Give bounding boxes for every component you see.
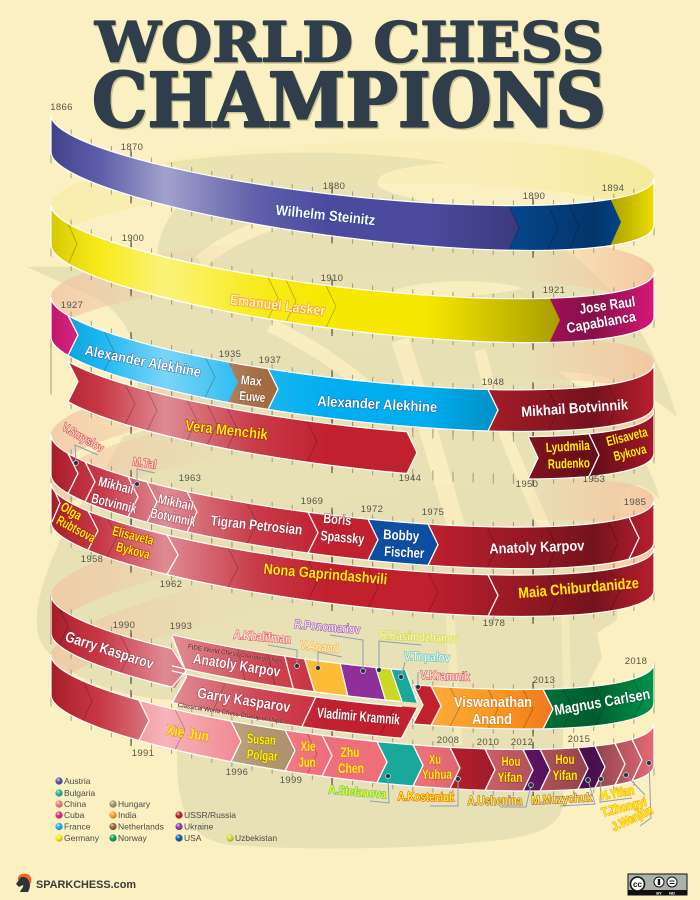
champion: Zhu Chen: Zhu xyxy=(340,744,360,760)
champion: Boris Spassky: Spassky xyxy=(320,527,365,547)
champion: Elisaveta Bykova: Bykova xyxy=(115,539,152,562)
callout: V.Smyslov: V.Smyslov xyxy=(60,420,107,455)
year labels: 1921 xyxy=(543,285,565,296)
legend item: Ukraine: Ukraine xyxy=(184,822,214,832)
champion: Mikhail Botvinnik xyxy=(90,473,139,517)
year labels: 1910 xyxy=(321,273,343,284)
legend item: USSR/Russia: USSR/Russia xyxy=(184,810,236,820)
ribbon women 1986-2018 xyxy=(50,655,655,832)
year labels: 1990 xyxy=(113,620,135,631)
callout: A.Stefanova xyxy=(328,774,390,803)
champion: Alexander Alekhine (2): Alexander Alekhine xyxy=(317,394,438,416)
title: CHAMPIONS xyxy=(94,58,608,146)
champion: Xie Jun (return) xyxy=(298,738,316,770)
champion: Bobby Fischer xyxy=(383,526,425,561)
champion: Mikhail Botvinnik (return): Mikhail xyxy=(157,491,195,514)
champion: Lyudmila Rudenko: Rudenko xyxy=(548,455,590,472)
callout: A.Khalifman xyxy=(233,628,299,668)
champion: Susan Polgar: Susan xyxy=(246,730,276,748)
year labels: 1972 xyxy=(361,504,383,515)
legend item: India xyxy=(109,810,137,820)
champion: Max Euwe: Euwe xyxy=(239,388,266,405)
year labels: 1969 xyxy=(301,496,323,507)
year labels: 1958 xyxy=(81,554,103,565)
year labels: 1978 xyxy=(483,618,505,629)
year labels: 1993 xyxy=(170,621,192,632)
callout: R.Ponomariov: R.Ponomariov xyxy=(294,617,361,637)
champion: Hou Yifan: Hou xyxy=(502,753,520,769)
champion: Anatoly Karpov (FIDE): Anatoly Karpov xyxy=(192,650,282,681)
champion: Susan Polgar xyxy=(246,730,279,764)
year labels: 1890 xyxy=(523,191,545,202)
callout: J.Wenjun xyxy=(609,761,655,834)
ribbon women 1956-1986 xyxy=(50,483,655,618)
champion: Viswanathan Anand xyxy=(454,694,532,728)
callout: V.Anand: V.Anand xyxy=(299,638,340,656)
champion: Elisaveta Bykova: Bykova xyxy=(612,441,648,464)
year labels: 1866 xyxy=(50,102,73,113)
callout: M.Tal: M.Tal xyxy=(132,454,157,472)
legend item: China: China xyxy=(64,799,86,809)
champion: Zhu Chen: Chen xyxy=(338,760,364,776)
callout: A.Stefanova: A.Stefanova xyxy=(328,783,388,802)
champion: Jose Raul Capablanca xyxy=(565,294,638,337)
champion: Boris Spassky: Boris xyxy=(323,510,352,528)
callout: V.Topalov xyxy=(399,649,450,679)
callout: J.Wenjun: J.Wenjun xyxy=(609,803,655,834)
callout: R.Kasimdzhanov: R.Kasimdzhanov xyxy=(379,628,459,646)
callout: A.Khalifman: A.Khalifman xyxy=(233,628,292,647)
year labels: 1894 xyxy=(602,183,624,194)
champion: Mikhail Botvinnik (return) xyxy=(149,491,197,530)
champion: Hou Yifan xyxy=(498,753,522,785)
callout: A.Kosteniuk xyxy=(397,777,460,806)
callout: T.Zhongyi xyxy=(600,773,648,819)
callout: V.Anand xyxy=(299,638,342,670)
callout: V.Topalov: V.Topalov xyxy=(404,649,450,665)
callout: H.Yifan: H.Yifan xyxy=(599,783,635,803)
champion: Vera Menchik: Vera Menchik xyxy=(184,417,269,444)
champion: Xie Jun (return): Xie xyxy=(300,738,316,754)
champion: Xie Jun: Xie Jun xyxy=(165,722,210,745)
year labels: 1996 xyxy=(226,767,248,778)
champion: Mikhail Botvinnik (return): Botvinnik xyxy=(149,505,197,530)
legend item: Uzbekistan: Uzbekistan xyxy=(235,833,277,843)
ribbon 1896-1926: Lasker and Capablanca xyxy=(50,205,655,344)
champion: Wilhelm Steinitz: Wilhelm Steinitz xyxy=(275,203,376,229)
champion: Maia Chiburdanidze: Maia Chiburdanidze xyxy=(518,575,640,602)
champion: Alexander Alekhine (1): Alexander Alekhine xyxy=(83,343,202,381)
champion: Max Euwe xyxy=(239,372,266,405)
champion: Xie Jun (return): Jun xyxy=(298,754,316,770)
year labels: 2013 xyxy=(533,675,555,686)
year labels: 1991 xyxy=(132,748,154,759)
champion: Hou Yifan (return): Yifan xyxy=(552,767,578,783)
champion: Garry Kasparov (Classical): Garry Kasparov xyxy=(196,685,292,716)
champion: Elisaveta Bykova xyxy=(605,424,649,464)
ribbon 1986-2018 xyxy=(51,595,654,739)
champion: Max Euwe: Max xyxy=(240,372,263,389)
champion: Nona Gaprindashvili: Nona Gaprindashvili xyxy=(263,561,388,588)
year labels: 1870 xyxy=(121,142,143,153)
champion: Elisaveta Bykova xyxy=(111,523,156,562)
champion: Bobby Fischer: Bobby xyxy=(383,526,420,544)
legend item: Norway: Norway xyxy=(118,833,148,843)
ribbon 1956-1986 xyxy=(50,422,655,570)
year labels: 1963 xyxy=(179,473,201,484)
year labels: 2010 xyxy=(477,737,499,748)
champion: Lyudmila Rudenko: Lyudmila xyxy=(545,438,590,455)
ribbon women 1927-1953 xyxy=(68,360,654,480)
champion: Anatoly Karpov: Anatoly Karpov xyxy=(489,538,585,558)
legend item: Austria: Austria xyxy=(64,776,91,786)
champion: Magnus Carlsen: Magnus Carlsen xyxy=(553,686,651,719)
badge: Creative Commons BY-ND: BY xyxy=(656,890,662,895)
champion: Jose Raul Capablanca: Capablanca xyxy=(565,309,638,337)
callout: V.Kramnik xyxy=(416,668,470,689)
legend item: USA: USA xyxy=(184,833,202,843)
logo: SparkChess: SPARKCHESS.com xyxy=(36,879,136,891)
badge: Creative Commons BY-ND: cc xyxy=(633,880,642,889)
callout: A.Kosteniuk: A.Kosteniuk xyxy=(397,790,455,804)
year labels xyxy=(50,102,647,786)
champion: Olga Rubtsova: Rubtsova xyxy=(54,513,98,546)
champion: Olga Rubtsova xyxy=(54,499,98,546)
legend item: Bulgaria: Bulgaria xyxy=(64,788,95,798)
panel: FIDE championships branch xyxy=(172,634,418,703)
callout: T.Zhongyi: T.Zhongyi xyxy=(600,795,648,819)
title xyxy=(92,10,608,146)
callout: M.Tal xyxy=(132,454,157,486)
legend item: Netherlands: Netherlands xyxy=(118,822,164,832)
champion: Zhu Chen xyxy=(338,744,364,776)
year labels: 1880 xyxy=(323,181,345,192)
panel: Classical championships branch xyxy=(172,670,418,739)
legend item: India: India xyxy=(118,810,137,820)
ribbon 1926-1956: Alekhine, Euwe, Botvinnik xyxy=(50,297,655,432)
champion: Mikhail Botvinnik: Mikhail Botvinnik xyxy=(521,397,629,421)
champion: Elisaveta Bykova: Elisaveta xyxy=(605,424,649,449)
champion: Viswanathan Anand: Viswanathan xyxy=(454,694,532,711)
champion: Xu Yuhua xyxy=(422,751,452,782)
legend item: Cuba xyxy=(55,810,85,820)
callout: R.Kasimdzhanov xyxy=(377,628,459,672)
badge: Creative Commons BY-ND: ND xyxy=(669,890,675,895)
year labels: 2008 xyxy=(437,735,459,746)
legend xyxy=(55,776,277,843)
champion: Garry Kasparov: Garry Kasparov xyxy=(63,628,156,673)
back of ribbon turns xyxy=(51,140,654,695)
callout: V.Kramnik: V.Kramnik xyxy=(420,668,470,684)
icon: knight xyxy=(16,874,31,892)
champion: Boris Spassky xyxy=(320,510,365,547)
year labels: 2012 xyxy=(511,737,533,748)
year labels: 1937 xyxy=(259,355,281,366)
label: Classical World Chess Championships: Classical World Chess Championships xyxy=(177,702,284,725)
champion: Mikhail Botvinnik: Mikhail xyxy=(97,473,136,497)
chess knight silhouette xyxy=(27,152,677,848)
callout: A.Ushenina xyxy=(468,783,533,808)
champion: Elisaveta Bykova: Elisaveta xyxy=(111,523,156,548)
legend item: Hungary: Hungary xyxy=(118,799,151,809)
label: FIDE World Chess Championships: FIDE World Chess Championships xyxy=(187,644,284,666)
champion: Vladimir Kramnik: Vladimir Kramnik xyxy=(316,705,401,729)
year labels: 1962 xyxy=(160,579,182,590)
champion: Xu Yuhua: Xu xyxy=(429,751,441,767)
champion: Mikhail Botvinnik: Botvinnik xyxy=(90,490,139,517)
year labels: 1950 xyxy=(516,479,538,490)
callout: M.Muzychuk xyxy=(531,778,595,808)
legend item: USA xyxy=(175,833,202,843)
ribbon 1866-1896: Steinitz xyxy=(50,115,655,251)
champion: Olga Rubtsova: Olga xyxy=(58,499,85,523)
champion: Xu Yuhua: Yuhua xyxy=(422,766,452,782)
callout: A.Ushenina: A.Ushenina xyxy=(468,794,523,808)
legend item: Germany: Germany xyxy=(64,833,100,843)
champion: Hou Yifan (return) xyxy=(552,751,578,783)
callout: R.Ponomariov xyxy=(294,617,365,673)
timeline ticks xyxy=(51,115,654,791)
year labels: 1999 xyxy=(280,775,302,786)
champion: Hou Yifan: Yifan xyxy=(498,769,522,785)
legend item: France: France xyxy=(64,822,91,832)
year labels: 1900 xyxy=(122,233,144,244)
champion: Tigran Petrosian: Tigran Petrosian xyxy=(210,513,303,539)
champion: Bobby Fischer: Fischer xyxy=(384,543,425,561)
logo: SparkChess xyxy=(16,874,136,892)
title: WORLD CHESS xyxy=(94,10,604,74)
legend item: Cuba: Cuba xyxy=(64,810,85,820)
badge: Creative Commons BY-ND xyxy=(628,874,687,895)
year labels: 1935 xyxy=(219,349,241,360)
callout: M.Muzychuk: M.Muzychuk xyxy=(531,790,593,808)
year labels: 1953 xyxy=(583,474,605,485)
year labels: 1948 xyxy=(482,377,504,388)
year labels: 2015 xyxy=(568,734,590,745)
year labels: 1975 xyxy=(422,507,444,518)
callout: H.Yifan xyxy=(599,777,635,803)
year labels: 1985 xyxy=(624,497,646,508)
champion: Emanuel Lasker: Emanuel Lasker xyxy=(229,292,326,320)
champion: Viswanathan Anand: Anand xyxy=(472,711,512,728)
champion: Lyudmila Rudenko xyxy=(545,438,590,472)
year labels: 2018 xyxy=(625,656,647,667)
year labels: 1944 xyxy=(399,473,421,484)
champion: Susan Polgar: Polgar xyxy=(246,746,279,764)
title: CHAMPIONS xyxy=(92,56,606,144)
champion: Hou Yifan (return): Hou xyxy=(556,751,574,767)
title: WORLD CHESS xyxy=(95,11,605,76)
champion: Jose Raul Capablanca: Jose Raul xyxy=(579,294,636,318)
year labels: 1927 xyxy=(61,300,83,311)
